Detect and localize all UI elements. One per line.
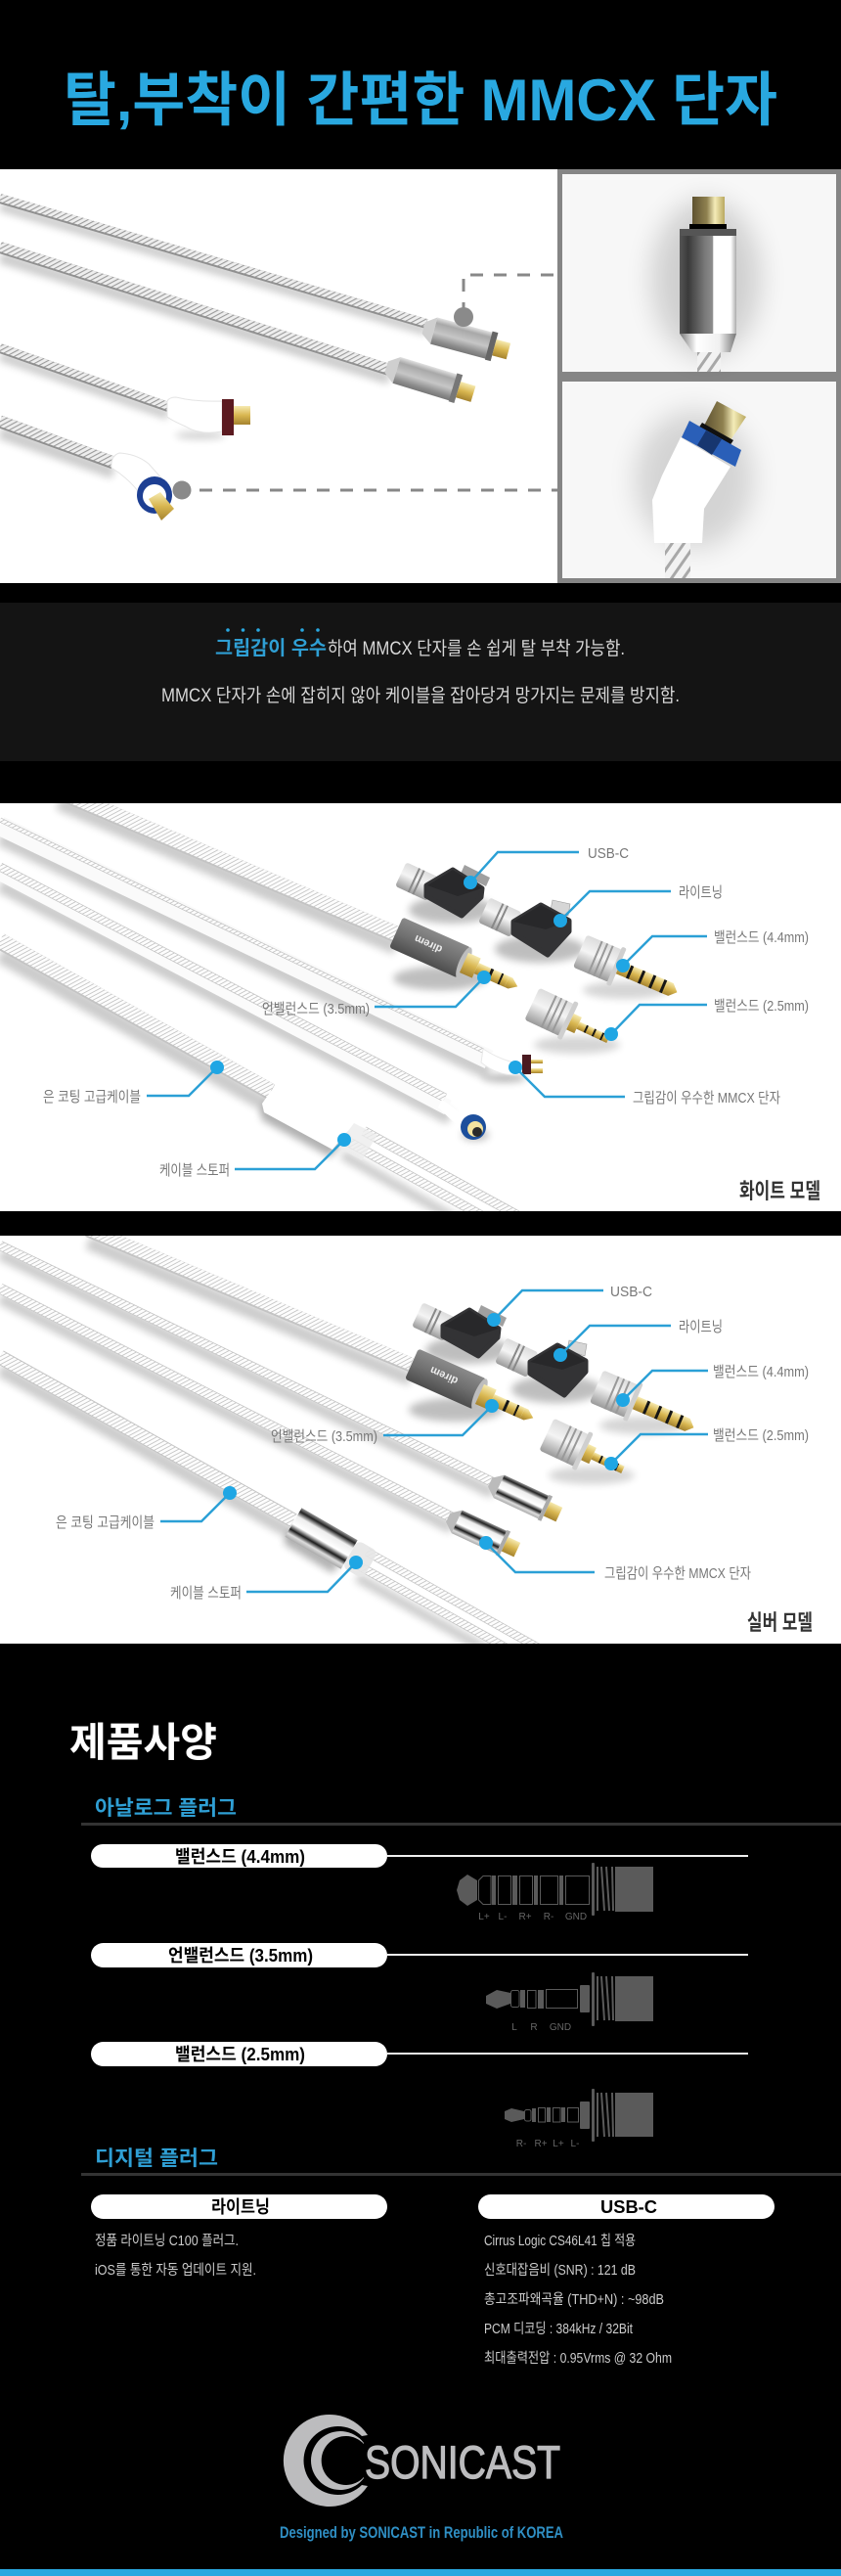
panel: detail photos	[557, 169, 841, 583]
thin cable to chrome connector	[0, 1245, 493, 1493]
callout: balanced 2.5mm: 밸런스드 (2.5mm)	[714, 998, 809, 1015]
row: balanced 2.5mm	[91, 2042, 748, 2149]
twin cables below stopper	[338, 1127, 520, 1211]
column: USB-C: 신호대잡음비 (SNR) : 121 dB	[484, 2262, 636, 2279]
thick cable to slider	[0, 940, 271, 1106]
row: unbalanced 3.5mm: 언밸런스드 (3.5mm)	[168, 1946, 313, 1966]
column: USB-C: USB-C	[600, 2197, 657, 2217]
logo: SONICAST: SONICAST	[365, 2436, 560, 2488]
diagram: 3.5mm plug	[486, 1972, 653, 2033]
callout: balanced 4.4mm	[616, 929, 809, 972]
diagram: 4.4mm plug: R+	[518, 1912, 532, 1922]
heading: product specifications: 제품사양	[69, 1720, 217, 1765]
chrome MMCX connector one	[484, 1469, 565, 1527]
diagram: 2.5mm plug: L+	[553, 2139, 564, 2149]
column: USB-C: 최대출력전압 : 0.95Vrms @ 32 Ohm	[484, 2350, 672, 2367]
callout: MMCX connector: 그립감이 우수한 MMCX 단자	[604, 1565, 751, 1582]
diagram: 4.4mm plug: R-	[544, 1912, 553, 1922]
callout: balanced 4.4mm	[616, 1364, 809, 1407]
callout: unbalanced 3.5mm: 언밸런스드 (3.5mm)	[262, 1001, 370, 1017]
diagram: 4.4mm plug	[457, 1863, 653, 1922]
row: unbalanced 3.5mm	[91, 1943, 748, 2033]
callout: silver coated cable	[56, 1486, 237, 1531]
callout: cable stopper: 케이블 스토퍼	[159, 1162, 230, 1179]
diagram: 3.5mm plug: L	[511, 2022, 517, 2033]
callout: Lightning	[553, 1319, 723, 1362]
second cable to chrome connector	[0, 1288, 452, 1528]
footer credit: Designed by SONICAST in Republic of KOREA	[280, 2523, 563, 2542]
cable: angled connector with red ring	[0, 347, 250, 439]
diagram: 2.5mm plug: R-	[516, 2139, 526, 2149]
callout: Lightning: 라이트닝	[679, 884, 723, 901]
callout: unbalanced 3.5mm	[262, 971, 491, 1017]
cable to 3.5mm plug	[59, 791, 396, 947]
hardware: USB-C plug	[395, 862, 495, 924]
description line one: 하여 MMCX 단자를 손 쉽게 탈 부착 가능함.	[328, 638, 625, 659]
diagram: 2.5mm plug	[505, 2089, 653, 2149]
column: Lightning: 라이트닝	[211, 2197, 270, 2217]
cable: straight connector one	[0, 198, 512, 365]
callout: cable stopper: 케이블 스토퍼	[170, 1585, 242, 1602]
hardware: 2.5mm plug	[538, 1416, 635, 1488]
model name: 실버 모델	[747, 1610, 813, 1635]
hardware: 4.4mm plug	[572, 932, 686, 1012]
section: digital plugs	[81, 2147, 841, 2367]
detail: straight MMCX connector	[562, 174, 836, 372]
row: balanced 4.4mm	[91, 1844, 748, 1922]
diagram: 4.4mm plug: GND	[565, 1912, 587, 1922]
detail: angled MMCX connector	[562, 382, 836, 578]
callout: balanced 2.5mm	[604, 998, 809, 1041]
subheading: analog plugs: 아날로그 플러그	[95, 1797, 237, 1820]
chrome sleeve and clear stopper	[284, 1508, 378, 1579]
callout: cable stopper	[170, 1556, 363, 1602]
flat cable with blue ring connector	[0, 867, 489, 1141]
callout: balanced 4.4mm: 밸런스드 (4.4mm)	[713, 1364, 809, 1380]
subheading: digital plugs: 디지털 플러그	[95, 2147, 218, 2170]
cable slider	[260, 1091, 377, 1160]
diagram: 2.5mm plug: R+	[534, 2139, 548, 2149]
silver model cables	[0, 1229, 538, 1659]
callout: USB-C: USB-C	[588, 845, 629, 862]
header band	[0, 0, 841, 169]
callout: dashed leader to bottom detail	[172, 481, 557, 499]
flat cable with red ring connector	[0, 820, 543, 1082]
cable: straight connector two	[0, 247, 477, 408]
panel: description band	[0, 603, 841, 761]
callout: silver coated cable	[43, 1061, 224, 1106]
highlighted phrase: 그립감이 우수	[215, 637, 327, 659]
row: balanced 2.5mm: 밸런스드 (2.5mm)	[175, 2045, 305, 2064]
callout: silver coated cable: 은 코팅 고급케이블	[56, 1514, 155, 1531]
panel: silver model	[0, 1229, 841, 1659]
chrome MMCX connector two	[442, 1505, 523, 1562]
diagram: 3.5mm plug: R	[530, 2022, 538, 2033]
diagram: 2.5mm plug: L-	[571, 2139, 579, 2149]
cable to 3.5mm plug	[88, 1229, 411, 1379]
column: USB-C: 총고조파왜곡율 (THD+N) : ~98dB	[484, 2291, 664, 2308]
diagram: 4.4mm plug: L+	[478, 1912, 490, 1922]
column: Lightning: iOS를 통한 자동 업데이트 지원.	[95, 2262, 256, 2279]
hardware: Lightning plug	[478, 897, 585, 963]
callout: MMCX connector	[479, 1536, 751, 1582]
column: USB-C: Cirrus Logic CS46L41 칩 적용	[484, 2233, 636, 2249]
callout: silver coated cable: 은 코팅 고급케이블	[43, 1089, 141, 1106]
callout: USB-C: USB-C	[610, 1284, 652, 1300]
hardware: 3.5mm plug	[405, 1348, 540, 1433]
panel: MMCX connector photo	[0, 169, 557, 583]
hardware: USB-C plug	[412, 1302, 511, 1364]
row: balanced 4.4mm: 밸런스드 (4.4mm)	[175, 1847, 305, 1867]
callout: balanced 2.5mm	[604, 1427, 809, 1470]
callout: USB-C	[487, 1284, 652, 1327]
hardware: 3.5mm plug	[389, 917, 524, 1002]
callout: unbalanced 3.5mm	[271, 1399, 499, 1445]
emphasis dots	[226, 628, 320, 632]
callout: dashed leader to top detail	[454, 275, 557, 327]
callout: MMCX connector	[509, 1061, 780, 1107]
hardware: 4.4mm plug	[589, 1368, 702, 1447]
callout: USB-C	[464, 845, 629, 889]
section: analog plugs	[81, 1797, 841, 2149]
cable: angled connector with blue ring	[0, 421, 174, 520]
callout: Lightning: 라이트닝	[679, 1319, 723, 1335]
callout: unbalanced 3.5mm: 언밸런스드 (3.5mm)	[271, 1428, 377, 1445]
callout: MMCX connector: 그립감이 우수한 MMCX 단자	[633, 1090, 780, 1107]
panel: white model	[0, 791, 841, 1227]
twin cables below stopper	[353, 1552, 540, 1644]
white model cables	[0, 791, 543, 1227]
callout: balanced 2.5mm: 밸런스드 (2.5mm)	[713, 1427, 809, 1444]
hardware: Lightning plug	[495, 1337, 601, 1403]
diagram: 4.4mm plug: L-	[499, 1912, 507, 1922]
callout: Lightning	[553, 884, 723, 927]
hardware: 2.5mm plug	[523, 985, 620, 1058]
column: USB-C: PCM 디코딩 : 384kHz / 32Bit	[484, 2321, 633, 2337]
callout: balanced 4.4mm: 밸런스드 (4.4mm)	[714, 929, 809, 946]
logo: SONICAST	[284, 2415, 560, 2507]
column: Lightning	[91, 2194, 387, 2279]
column: USB-C	[478, 2194, 775, 2367]
description line two: MMCX 단자가 손에 잡히지 않아 케이블을 잡아당겨 망가지는 문제를 방지함.	[161, 685, 680, 706]
footer bar	[0, 2569, 841, 2576]
callout: cable stopper	[159, 1133, 351, 1179]
title: 탈,부착이 간편한 MMCX 단자	[64, 68, 777, 133]
column: Lightning: 정품 라이트닝 C100 플러그.	[95, 2233, 239, 2249]
diagram: 3.5mm plug: GND	[550, 2022, 571, 2033]
thick cable to chrome sleeve	[0, 1357, 293, 1534]
